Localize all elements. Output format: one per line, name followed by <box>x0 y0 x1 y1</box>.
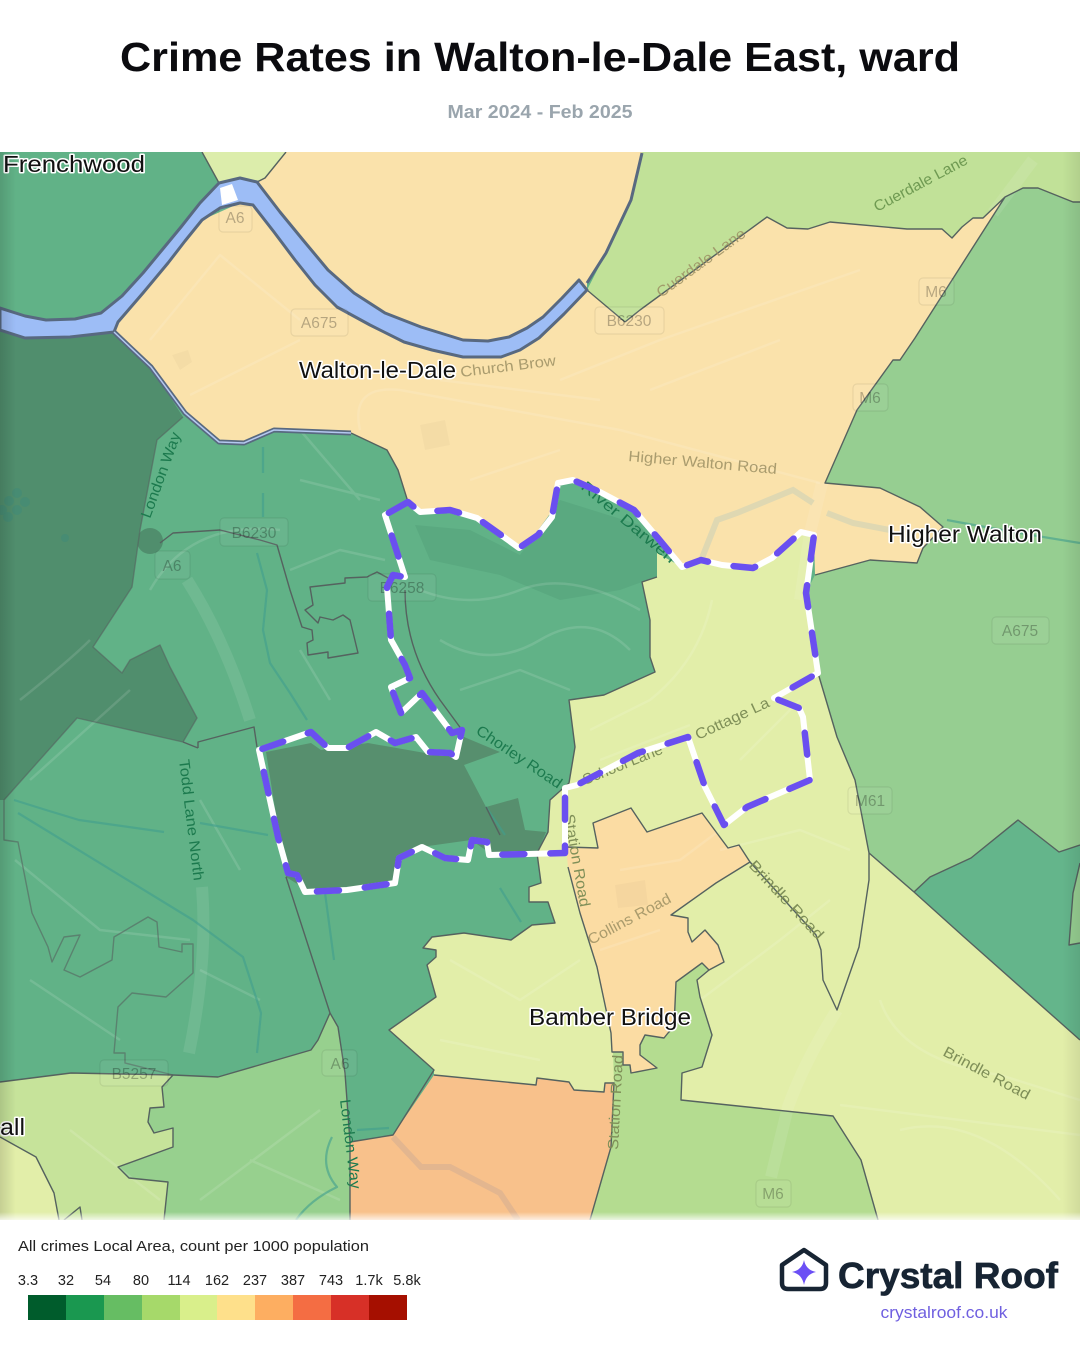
legend value labels: 1.7k <box>355 1273 383 1289</box>
shield: B6258 <box>368 574 436 601</box>
river Ribble <box>0 153 642 443</box>
legend value labels <box>18 1273 421 1289</box>
shield: B5257 <box>100 1060 168 1086</box>
shield: M61: M61 <box>855 793 885 810</box>
place: Bamber Bridge: Bamber Bridge <box>529 1004 691 1030</box>
legend value labels: 743 <box>319 1273 343 1289</box>
road label: Cottage Lane: Cottage La <box>693 694 773 744</box>
logo: Crystal Roof <box>782 1250 1059 1322</box>
river main channel <box>0 178 587 357</box>
motorway slip road <box>700 490 890 563</box>
shield: A675 east <box>992 617 1049 644</box>
place names <box>0 151 1042 1140</box>
legend <box>18 1238 421 1320</box>
ward boundary: Walton-le-Dale East <box>259 480 818 892</box>
legend value labels: 114 <box>167 1273 191 1289</box>
area: top right light green <box>587 152 1080 330</box>
logo url: crystalroof.co.uk <box>880 1304 1008 1322</box>
legend value labels: 54 <box>95 1273 111 1289</box>
road label: River Darwen: River Darwen <box>577 478 679 567</box>
road label: Collins Road: Collins Road <box>585 890 674 949</box>
road label: Cuerdale Lane east: Cuerdale Lane <box>871 152 971 216</box>
road on orange <box>393 1137 518 1220</box>
area: beige north of river <box>258 152 642 340</box>
road labels <box>138 152 1033 1190</box>
road label: Chorley Road: Chorley Road <box>473 722 565 792</box>
title: Crime Rates in Walton-le-Dale East, ward <box>120 34 960 80</box>
shield: M6 north <box>919 278 954 305</box>
area: right green <box>809 188 1080 891</box>
shield: A675 <box>291 309 348 336</box>
area: darker ward north <box>415 500 657 600</box>
road label: Brindle Road centre: Brindle Road <box>745 857 827 943</box>
area: orange <box>350 1075 614 1220</box>
icon: house with sparkle <box>782 1250 826 1289</box>
road label: Cuerdale Lane west: Cuerdale Lane <box>653 225 749 301</box>
shield: A6: A6 <box>226 210 244 227</box>
legend value labels: 32 <box>58 1273 74 1289</box>
legend value labels: 162 <box>205 1273 229 1289</box>
road label: Station Road south: Station Road <box>605 1054 627 1150</box>
choropleth map <box>0 151 1080 1220</box>
road label: Church Brow: Church Brow <box>459 352 557 381</box>
shield: A675: A675 <box>301 315 337 332</box>
place: partial name: all <box>0 1114 25 1140</box>
subtitle: date range: Mar 2024 - Feb 2025 <box>448 102 632 122</box>
legend value labels: 237 <box>243 1273 267 1289</box>
river Darwen channel <box>114 332 351 443</box>
shield: A6 west <box>155 551 190 579</box>
area: lower left lime <box>0 1073 173 1220</box>
area: beige Walton-le-Dale <box>114 197 1005 575</box>
area: bottom left green <box>118 1013 350 1220</box>
place: Higher Walton: Higher Walton <box>888 521 1042 547</box>
shield: B6230 <box>595 307 664 334</box>
road label: Higher Walton Road: Higher Walton Road <box>628 448 778 478</box>
shield: A6 south: A6 <box>331 1056 349 1073</box>
road label: London Way north: London Way <box>138 429 185 520</box>
shield: B6230 west: B6230 <box>232 525 277 542</box>
road number shields <box>100 206 1049 1207</box>
legend title: All crimes Local Area, count per 1000 population <box>18 1238 369 1255</box>
solar panel dots <box>0 488 69 542</box>
shield: M6 mid <box>853 384 888 411</box>
shield: M6 south: M6 <box>762 1186 784 1203</box>
area: top left light patch <box>202 152 286 183</box>
area: Collins Road beige <box>566 808 750 1073</box>
legend value labels: 80 <box>133 1273 149 1289</box>
legend value labels: 3.3 <box>18 1273 38 1289</box>
river north bank <box>587 153 642 283</box>
streams and water <box>14 447 1080 1220</box>
shield: M6 mid: M6 <box>859 390 881 407</box>
area: lower centre green <box>590 963 878 1220</box>
map edge shading <box>0 152 1080 1220</box>
place: Walton-le-Dale: Walton-le-Dale <box>299 357 456 383</box>
road label: School Lane: School Lane <box>580 741 665 789</box>
shield: M61 <box>848 787 892 814</box>
building patches <box>172 350 648 908</box>
legend colour scale <box>28 1295 407 1320</box>
legend value labels: 5.8k <box>393 1273 421 1289</box>
shield: B5257: B5257 <box>112 1066 156 1083</box>
area: dark ward south <box>266 737 546 890</box>
place: Frenchwood: Frenchwood <box>3 151 145 177</box>
boundary lines <box>0 152 1080 1220</box>
road label: London Way south: London Way <box>336 1098 364 1190</box>
shield: A6 west: A6 <box>163 558 181 575</box>
road label: Station Road north: Station Road <box>560 813 593 908</box>
shield: M6 south <box>756 1180 791 1207</box>
logo wordmark: Crystal Roof <box>838 1255 1059 1296</box>
shield: B6230: B6230 <box>607 313 652 330</box>
shield: M6 north: M6 <box>925 284 947 301</box>
area: dark triangle east <box>914 820 1080 1040</box>
area: corner pale <box>0 1137 59 1220</box>
area: east corner patch <box>1069 863 1080 945</box>
shield: A675 east: A675 <box>1002 623 1038 640</box>
area: light yellow green <box>389 532 1080 1220</box>
road label: Todd Lane North: Todd Lane North <box>175 758 207 882</box>
street network <box>0 160 1080 1200</box>
area: dark green west <box>0 330 197 800</box>
shield: A6 south <box>322 1050 357 1076</box>
shield: B6258: B6258 <box>380 580 424 597</box>
shield: B6230 west <box>220 518 288 546</box>
shield: A6 <box>219 206 252 232</box>
map base: mid green <box>0 152 815 1142</box>
road label: Brindle Road east: Brindle Road <box>940 1044 1033 1104</box>
legend value labels: 387 <box>281 1273 305 1289</box>
